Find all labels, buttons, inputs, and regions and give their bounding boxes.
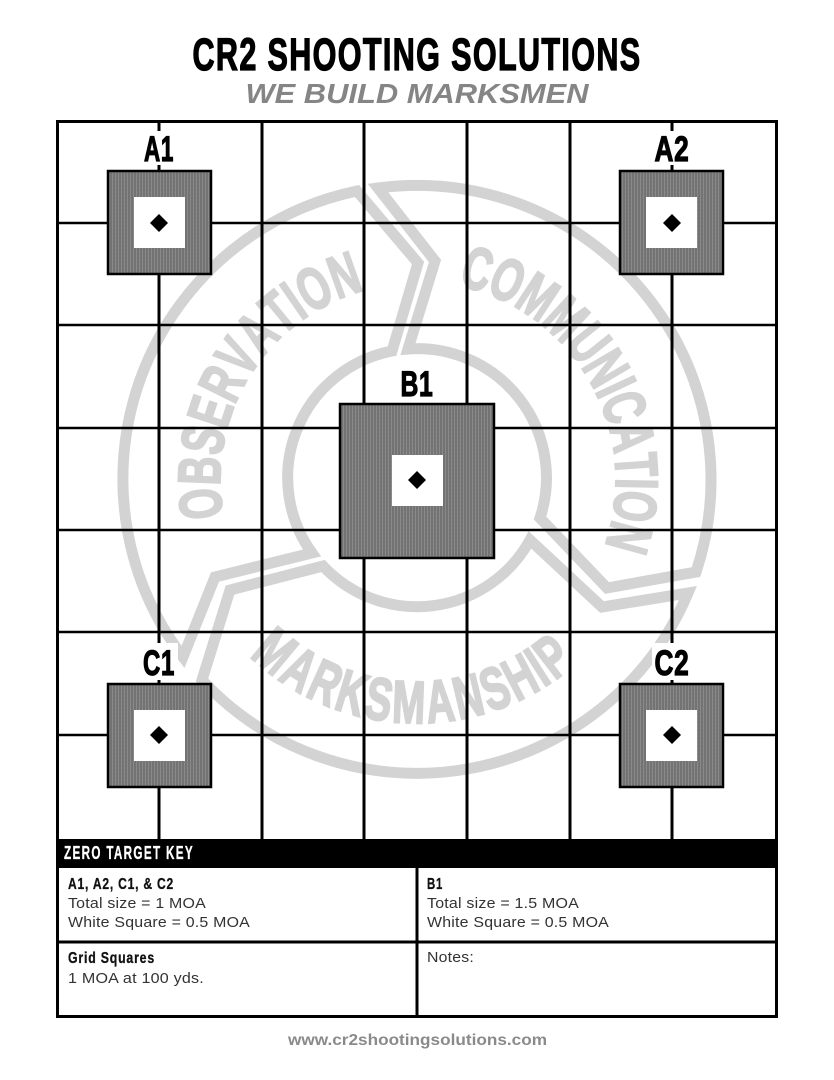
- logo word: OBSERVATION: I: [270, 270, 317, 331]
- logo word: OBSERVATION: [165, 238, 369, 523]
- logo word: COMMUNICATION: C: [455, 233, 501, 305]
- logo word: OBSERVATION: E: [174, 389, 246, 435]
- website footer: www.cr2shootingsolutions.com: [287, 1032, 547, 1049]
- target C2: C2: [654, 644, 690, 683]
- logo word: OBSERVATION: B: [165, 455, 234, 486]
- logo word: COMMUNICATION: O: [480, 243, 536, 317]
- logo word: COMMUNICATION: M: [506, 259, 570, 334]
- logo word: COMMUNICATION: N: [570, 339, 642, 398]
- logo word: OBSERVATION: O: [166, 485, 236, 523]
- logo word: COMMUNICATION: N: [593, 515, 665, 561]
- key cell: B1: White Square = 0.5 MOA: [427, 914, 609, 931]
- logo word: COMMUNICATION: O: [600, 487, 670, 526]
- key cell: A1, A2, C1, C2: [68, 876, 250, 931]
- logo word: MARKSMANSHIP: M: [391, 668, 427, 736]
- target A2: A2: [654, 130, 690, 169]
- key cell: B1: [427, 876, 609, 931]
- target A1: [108, 130, 211, 274]
- logo word: COMMUNICATION: M: [531, 283, 601, 354]
- target A2: [620, 130, 723, 274]
- logo word: MARKSMANSHIP: I: [514, 636, 560, 698]
- key heading bar: [57, 839, 777, 868]
- logo word: COMMUNICATION: T: [602, 451, 671, 479]
- logo word: MARKSMANSHIP: K: [329, 656, 376, 729]
- logo word: OBSERVATION: A: [222, 299, 291, 366]
- logo word: COMMUNICATION: I: [603, 478, 670, 490]
- key cell: grid squares: Grid Squares: [68, 950, 155, 967]
- target B1: B1: [400, 365, 434, 404]
- logo word: MARKSMANSHIP: [241, 615, 584, 736]
- logo word: COMMUNICATION: A: [597, 416, 668, 457]
- key cell: A1, A2, C1, C2: Total size = 1 MOA: [68, 895, 206, 912]
- target grid: [57, 121, 777, 839]
- logo word: MARKSMANSHIP: R: [299, 646, 352, 719]
- key cell: A1, A2, C1, C2: White Square = 0.5 MOA: [68, 914, 250, 931]
- watermark logo: [123, 185, 711, 773]
- logo word: COMMUNICATION: I: [583, 368, 649, 406]
- key cell: B1: B1: [427, 876, 443, 893]
- logo word: MARKSMANSHIP: S: [360, 664, 398, 734]
- logo word: MARKSMANSHIP: A: [422, 666, 458, 736]
- logo word: OBSERVATION: S: [168, 421, 239, 459]
- logo word: COMMUNICATION: C: [588, 382, 661, 432]
- logo word: COMMUNICATION: [455, 233, 671, 561]
- frame and table dividers: [57, 122, 777, 1017]
- subtitle: WE BUILD MARKSMEN: [246, 78, 590, 109]
- key cell: notes: Notes:: [427, 949, 474, 966]
- logo word: OBSERVATION: O: [284, 251, 343, 325]
- logo word: MARKSMANSHIP: N: [446, 660, 490, 732]
- key heading bar: ZERO TARGET KEY: [64, 843, 194, 863]
- target C2: [620, 643, 723, 787]
- target C1: [108, 643, 211, 787]
- logo word: MARKSMANSHIP: A: [270, 633, 330, 705]
- logo word: OBSERVATION: V: [202, 327, 273, 387]
- key cell: grid squares: [68, 950, 204, 987]
- key cell: B1: Total size = 1.5 MOA: [427, 895, 579, 912]
- logo word: OBSERVATION: R: [186, 355, 259, 411]
- logo word: MARKSMANSHIP: P: [522, 621, 584, 691]
- target B1: [340, 365, 494, 558]
- logo outline: three sectors: [123, 185, 711, 773]
- logo word: MARKSMANSHIP: M: [241, 615, 309, 687]
- logo word: MARKSMANSHIP: H: [492, 641, 548, 713]
- target C1: C1: [143, 644, 175, 683]
- key cell: A1, A2, C1, C2: A1, A2, C1, & C2: [68, 876, 174, 893]
- logo word: OBSERVATION: N: [319, 238, 369, 311]
- logo word: COMMUNICATION: U: [553, 311, 624, 375]
- target A1: A1: [144, 130, 174, 169]
- logo word: MARKSMANSHIP: S: [471, 652, 519, 724]
- logo word: OBSERVATION: T: [247, 279, 309, 346]
- key cell: grid squares: 1 MOA at 100 yds.: [68, 970, 204, 987]
- key table: [57, 839, 777, 987]
